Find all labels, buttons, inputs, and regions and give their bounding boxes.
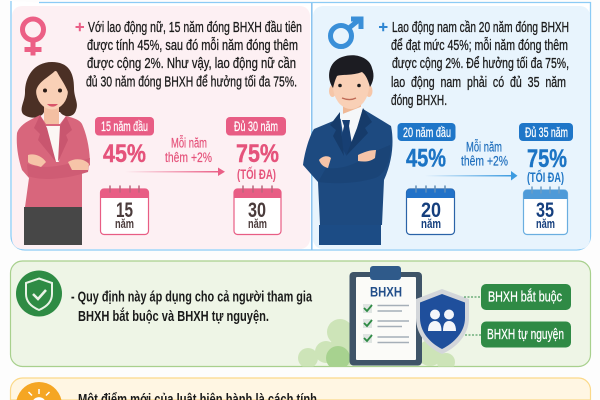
icon: calendar 35 years: 35 (536, 199, 554, 222)
icon: calendar 35 years (524, 187, 568, 234)
icon: calendar 20 years (406, 186, 454, 234)
badge: BHXH tự nguyện (465, 322, 571, 348)
icon: calendar 20 years: năm (421, 216, 441, 231)
label: yearly increment (165, 136, 212, 165)
panel: benefit comparison frame (11, 1, 590, 250)
illustration: BHXH clipboard (350, 266, 422, 366)
badge: Đủ 30 năm: Đủ 30 năm (234, 119, 278, 134)
badge: BHXH bắt buộc (464, 284, 571, 310)
badge: BHXH tự nguyện: BHXH tự nguyện (487, 326, 564, 343)
arrow: female progression (125, 168, 225, 176)
icon: calendar 35 years: năm (536, 216, 555, 231)
icon: calendar 15 years: 15 (116, 199, 133, 222)
badge: Đủ 35 năm (519, 123, 573, 141)
icon: calendar 30 years (234, 186, 281, 234)
illustration: businessman (303, 55, 393, 245)
text: scope note: BHXH bắt buộc và BHXH tự nguyện. (78, 307, 269, 325)
value: 75% maximum male (527, 145, 567, 185)
icon: calendar 20 years: 20 (421, 199, 441, 222)
icon: female symbol (22, 19, 44, 56)
arrow: male progression (425, 171, 518, 180)
icon: shield with people (416, 289, 469, 354)
label: yearly increment: Mỗi năm (171, 136, 207, 151)
icon: light bulb (17, 382, 61, 400)
value: 75% maximum: 75% (236, 140, 279, 168)
label: yearly increment male: Mỗi năm (466, 140, 502, 155)
value: 75% maximum male: (TỐI ĐA) (527, 170, 564, 185)
text: female rule: đủ 30 năm đóng BHXH để hưởng tối đa 75%. (86, 74, 297, 90)
value: 45%: 45% (103, 140, 146, 168)
badge: Đủ 35 năm: Đủ 35 năm (525, 125, 568, 140)
value: 75% maximum (236, 140, 279, 182)
text: male rule (379, 20, 569, 109)
icon: calendar 15 years: năm (115, 216, 134, 231)
label: yearly increment: thêm +2% (165, 150, 212, 165)
text: scope note (71, 289, 312, 325)
panel: female workers (12, 6, 310, 249)
badge: BHXH bắt buộc: BHXH bắt buộc (488, 289, 562, 306)
text: male rule: đóng BHXH. (391, 93, 447, 109)
text: female rule: được tính 45%, sau đó mỗi năm đóng thêm (87, 37, 298, 54)
value: 75% maximum male: 75% (527, 145, 567, 173)
panel: scope of regulation (10, 261, 590, 371)
badge: 20 năm đầu (398, 123, 456, 141)
label: yearly increment male (461, 140, 508, 169)
icon: shield check (16, 270, 62, 316)
icon: calendar 30 years: năm (248, 216, 267, 231)
icon: male symbol (330, 19, 361, 46)
badge: Đủ 30 năm (226, 117, 286, 136)
decoration: foliage (298, 319, 455, 371)
panel: new calculation note (10, 378, 590, 400)
value: 75% maximum: (TỐI ĐA) (237, 167, 276, 182)
badge: 15 năm đầu (95, 117, 154, 136)
label: yearly increment male: thêm +2% (461, 154, 508, 169)
text: female rule: Với lao động nữ, 15 năm đóng BHXH đầu tiên (88, 20, 302, 36)
value: 45% male: 45% (406, 145, 446, 173)
illustration: businesswoman (17, 62, 90, 245)
badge: 20 năm đầu: 20 năm đầu (403, 125, 451, 140)
icon: calendar 30 years: 30 (248, 199, 266, 222)
text: female rule: được cộng 2%. Như vậy, lao động nữ cần (87, 56, 296, 72)
text: female rule (76, 20, 302, 90)
illustration: BHXH clipboard: BHXH (370, 284, 402, 300)
text: scope note: - Quy định này áp dụng cho cả người tham gia (71, 289, 312, 306)
panel: male workers (303, 6, 590, 249)
icon: calendar 15 years (100, 186, 148, 234)
badge: 15 năm đầu: 15 năm đầu (101, 119, 148, 134)
